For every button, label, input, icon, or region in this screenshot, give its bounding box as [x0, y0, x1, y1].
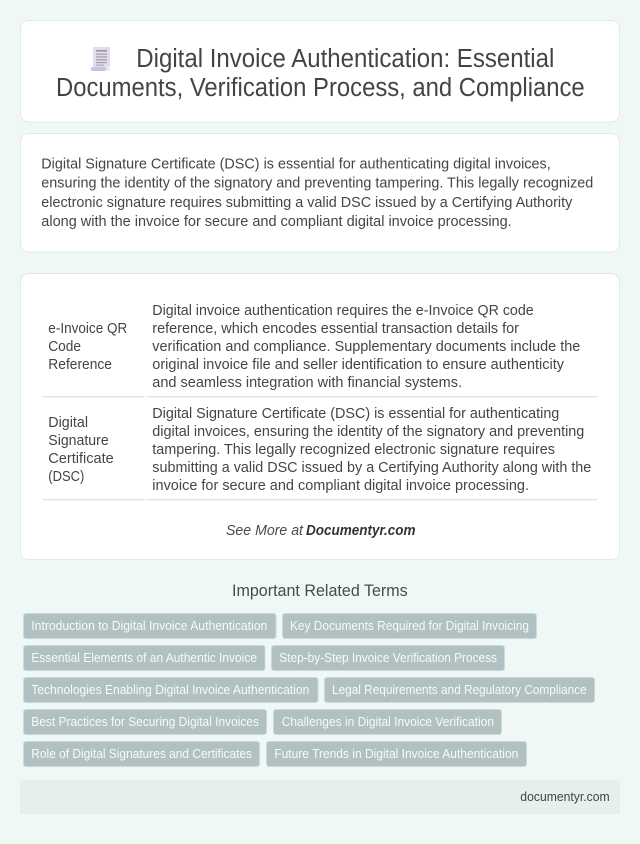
row description: tampering. This legally recognized electronic signature requires: [152, 442, 555, 458]
see more link: [226, 523, 416, 539]
row description: [152, 303, 580, 391]
title: [56, 45, 585, 102]
title: Digital Invoice Authentication: Essential: [136, 45, 554, 73]
icon: invoice receipt: [91, 47, 110, 71]
tag: Key Documents Required for Digital Invoicing: [290, 619, 529, 633]
tag: [266, 742, 526, 766]
row description: submitting a valid DSC issued by a Certifying Authority along with the: [152, 460, 591, 476]
summary text: [41, 156, 593, 230]
row description: verification and compliance. Supplementary documents include the: [152, 339, 580, 355]
related term tags: [24, 614, 594, 766]
row label: Signature: [48, 433, 109, 449]
row label: Certificate: [48, 451, 114, 467]
row description: original invoice file and seller identification to ensure authenticity: [152, 357, 565, 373]
row description: Digital Signature Certificate (DSC) is essential for authenticating: [152, 406, 559, 422]
row label: [48, 321, 127, 373]
table row: e-Invoice QR Code Reference: [48, 303, 580, 391]
row label: Reference: [48, 357, 112, 373]
row description: reference, which encodes essential transaction details for: [152, 321, 519, 337]
tag: [24, 678, 318, 702]
row description: and seamless integration with financial systems.: [152, 375, 462, 391]
see more link: See More at: [226, 523, 304, 539]
panel: title card: [20, 20, 620, 122]
heading: important related terms: Important Related Terms: [232, 582, 408, 600]
summary text: electronic signature requires submitting a valid DSC issued by a Certifying Authority: [41, 195, 573, 211]
tag: [324, 678, 594, 702]
footer bar: [20, 780, 620, 814]
row label: Code: [48, 339, 81, 355]
table row: Digital Signature Certificate (DSC): [48, 406, 591, 494]
tag: Challenges in Digital Invoice Verification: [282, 715, 494, 729]
row label: (DSC): [48, 469, 84, 485]
panel: document table: [20, 274, 620, 560]
tag: Essential Elements of an Authentic Invoice: [31, 651, 257, 665]
footer source: documentyr.com: [520, 790, 610, 804]
tag: [272, 646, 504, 670]
title: Documents, Verification Process, and Compliance: [56, 74, 585, 102]
row label: Digital: [48, 415, 88, 431]
row label: [48, 415, 114, 485]
tag: Role of Digital Signatures and Certificates: [31, 747, 252, 761]
row description: invoice for secure and compliant digital invoice processing.: [152, 478, 529, 494]
tag: [24, 646, 265, 670]
row description: digital invoices, ensuring the identity of the signatory and preventing: [152, 424, 584, 440]
tag: Legal Requirements and Regulatory Compliance: [332, 683, 587, 697]
see more link: Documentyr.com: [306, 523, 416, 539]
tag: Best Practices for Securing Digital Invoices: [31, 715, 259, 729]
panel: summary paragraph: [20, 134, 620, 252]
summary text: Digital Signature Certificate (DSC) is essential for authenticating digital invoices,: [41, 156, 551, 172]
tag: Step-by-Step Invoice Verification Process: [279, 651, 497, 665]
tag: Introduction to Digital Invoice Authentication: [31, 619, 267, 633]
tag: [24, 614, 276, 638]
tag: Technologies Enabling Digital Invoice Authentication: [31, 683, 309, 697]
summary text: ensuring the identity of the signatory and preventing tampering. This legally recognized: [41, 176, 593, 192]
tag: [282, 614, 536, 638]
row label: e-Invoice QR: [48, 321, 127, 337]
tag: Future Trends in Digital Invoice Authentication: [274, 747, 518, 761]
tag: [24, 710, 266, 734]
row description: [152, 406, 591, 494]
tag: [274, 710, 502, 734]
row description: Digital invoice authentication requires the e-Invoice QR code: [152, 303, 534, 319]
tag: [24, 742, 260, 766]
summary text: along with the invoice for secure and compliant digital invoice processing.: [41, 214, 512, 230]
